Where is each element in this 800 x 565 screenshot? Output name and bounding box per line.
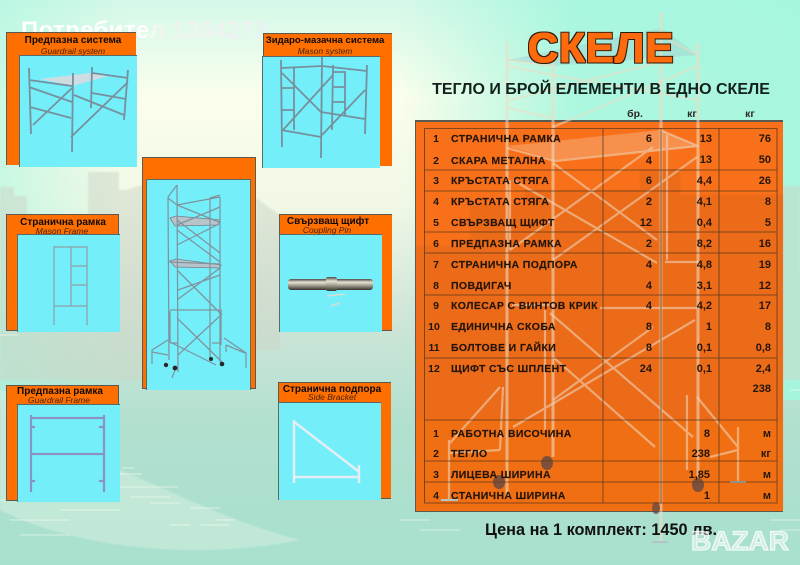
- rows: element list: 13: [700, 154, 712, 166]
- column headers: [627, 108, 755, 120]
- rows: element list: 11: [428, 342, 440, 354]
- rows: element list: 5: [433, 217, 439, 229]
- table background: [415, 120, 783, 512]
- rows: element list: ПРЕДПАЗНА РАМКА: [451, 238, 562, 250]
- rows: element list: 24: [640, 363, 653, 375]
- rows: element list: 6: [646, 133, 652, 145]
- rows: specifications: 1: [704, 490, 710, 502]
- rows: specifications: кг: [761, 448, 771, 460]
- panel: mason system: [262, 33, 392, 168]
- rows: element list: 4,1: [697, 196, 712, 208]
- price: Цена на 1 комплект: 1450 лв.: [485, 521, 717, 539]
- icon: side bracket: [293, 420, 359, 483]
- heading: mason frame: Странична рамка: [20, 217, 106, 228]
- rows: element list: 10: [428, 321, 440, 333]
- rows: specifications: 1,85: [689, 469, 710, 481]
- subheading: guardrail system: Guardrail system: [41, 46, 105, 56]
- rows: element list: 12: [759, 280, 771, 292]
- rows: element list: 0,8: [756, 342, 771, 354]
- rows: specifications: ЛИЦЕВА ШИРИНА: [451, 469, 551, 481]
- icon: coupling pin: [288, 277, 373, 306]
- subheading: guardrail frame: Guardrail Frame: [28, 395, 90, 405]
- rows: specifications: 8: [704, 428, 710, 440]
- rows: element list: 9: [433, 300, 439, 312]
- rows: element list: СТРАНИЧНА РАМКА: [451, 133, 561, 145]
- column headers: бр.: [627, 108, 643, 120]
- rows: element list: КРЪСТАТА СТЯГА: [451, 175, 549, 187]
- heading: mason system: Зидаро-мазачна система: [266, 35, 385, 46]
- watermark: user number: Потребител 1364273: [21, 17, 268, 44]
- rows: element list: 4: [646, 259, 653, 271]
- panel: mason frame: [6, 214, 120, 332]
- rows: element list: 26: [759, 175, 771, 187]
- rows: element list: 2: [646, 196, 652, 208]
- panel: data table: [424, 128, 777, 503]
- rows: element list: 50: [759, 154, 771, 166]
- title: СКЕЛЕ: [528, 24, 674, 71]
- rows: element list: 12: [428, 363, 440, 375]
- rows: specifications: м: [763, 469, 771, 481]
- rows: element list: 4: [433, 196, 439, 208]
- rows: specifications: ТЕГЛО: [451, 448, 488, 460]
- rows: element list: 8,2: [697, 238, 712, 250]
- rows: element list: КОЛЕСАР С ВИНТОВ КРИК: [451, 300, 598, 312]
- rows: element list: 7: [433, 259, 439, 271]
- heading: guardrail frame: Предпазна рамка: [17, 386, 103, 397]
- rows: element list: ЩИФТ СЪС ШПЛЕНТ: [451, 363, 567, 375]
- rows: specifications: 2: [433, 448, 439, 460]
- rows: specifications: 1: [433, 428, 439, 440]
- rows: element list: 238: [753, 383, 771, 395]
- panel: full tower: [142, 157, 256, 390]
- rows: element list: 2,4: [756, 363, 772, 375]
- watermark: logo: BAZAR: [691, 526, 789, 556]
- rows: element list: 19: [759, 259, 771, 271]
- panel: guardrail frame: [6, 385, 120, 502]
- rows: element list: [428, 133, 772, 395]
- rows: element list: 4,2: [697, 300, 712, 312]
- rows: specifications: 3: [433, 469, 439, 481]
- rows: specifications: 238: [692, 448, 710, 460]
- rows: element list: 6: [646, 175, 652, 187]
- rows: element list: 5: [765, 217, 771, 229]
- rows: element list: 4,8: [697, 259, 712, 271]
- rows: element list: 4: [646, 155, 653, 167]
- rows: element list: 0,1: [697, 363, 712, 375]
- icon: guardrail scaffold: [29, 67, 128, 152]
- column headers: кг: [745, 108, 755, 120]
- rows: element list: ЕДИНИЧНА СКОБА: [451, 321, 556, 333]
- rows: element list: 1: [433, 133, 439, 145]
- rows: element list: 8: [765, 321, 771, 333]
- icon: mason scaffold: [281, 57, 367, 158]
- rows: element list: ПОВДИГАЧ: [451, 280, 512, 292]
- rows: element list: 12: [640, 217, 652, 229]
- rows: element list: 2: [433, 155, 439, 167]
- rows: element list: 8: [433, 280, 439, 292]
- rows: specifications: м: [763, 490, 771, 502]
- panel: guardrail system: [6, 32, 137, 167]
- panel: coupling pin: [279, 214, 392, 332]
- rows: element list: 2: [646, 238, 652, 250]
- rows: element list: 0,4: [697, 217, 713, 229]
- icon: guardrail frame: [31, 415, 104, 492]
- panel: side bracket: [278, 382, 391, 500]
- rows: specifications: [433, 428, 771, 502]
- subheading: coupling pin: Coupling Pin: [303, 225, 351, 235]
- rows: element list: 0,1: [697, 342, 712, 354]
- rows: element list: 4: [646, 280, 653, 292]
- rows: element list: 1: [706, 321, 712, 333]
- rows: specifications: РАБОТНА ВИСОЧИНА: [451, 428, 572, 440]
- rows: element list: 3,1: [697, 280, 712, 292]
- rows: element list: 8: [646, 342, 652, 354]
- rows: specifications: СТАНИЧНА ШИРИНА: [451, 490, 566, 502]
- table grid: [424, 128, 777, 503]
- rows: element list: КРЪСТАТА СТЯГА: [451, 196, 549, 208]
- rows: specifications: м: [763, 428, 771, 440]
- rows: element list: 16: [759, 238, 771, 250]
- column headers: кг: [687, 108, 697, 120]
- subheading: mason system: Mason system: [298, 46, 352, 56]
- rows: element list: 13: [700, 133, 712, 145]
- illustration: large scaffold overlay: [441, 12, 746, 543]
- rows: element list: 17: [759, 300, 771, 312]
- subtitle: ТЕГЛО И БРОЙ ЕЛЕМЕНТИ В ЕДНО СКЕЛЕ: [432, 79, 770, 98]
- rows: element list: СВЪРЗВАЩ ЩИФТ: [451, 217, 555, 229]
- rows: element list: СКАРА МЕТАЛНА: [451, 155, 546, 167]
- icon: mason frame: [54, 246, 87, 325]
- subheading: side bracket: Side Bracket: [308, 392, 357, 402]
- rows: specifications: 4: [433, 490, 439, 502]
- heading: side bracket: Странична подпора: [283, 384, 382, 395]
- rows: element list: 8: [646, 321, 652, 333]
- rows: element list: БОЛТОВЕ И ГАЙКИ: [451, 341, 556, 354]
- rows: element list: 4: [646, 300, 653, 312]
- rows: element list: 3: [433, 175, 439, 187]
- subheading: mason frame: Mason Frame: [36, 226, 88, 236]
- rows: element list: СТРАНИЧНА ПОДПОРА: [451, 259, 578, 271]
- heading: coupling pin: Свързващ щифт: [287, 215, 369, 227]
- rows: element list: 4,4: [697, 175, 713, 187]
- rows: element list: 76: [759, 133, 771, 145]
- heading: guardrail system: Предпазна система: [25, 35, 122, 46]
- rows: element list: 6: [433, 238, 439, 250]
- icon: full scaffold tower: [152, 185, 246, 378]
- rows: element list: 8: [765, 196, 771, 208]
